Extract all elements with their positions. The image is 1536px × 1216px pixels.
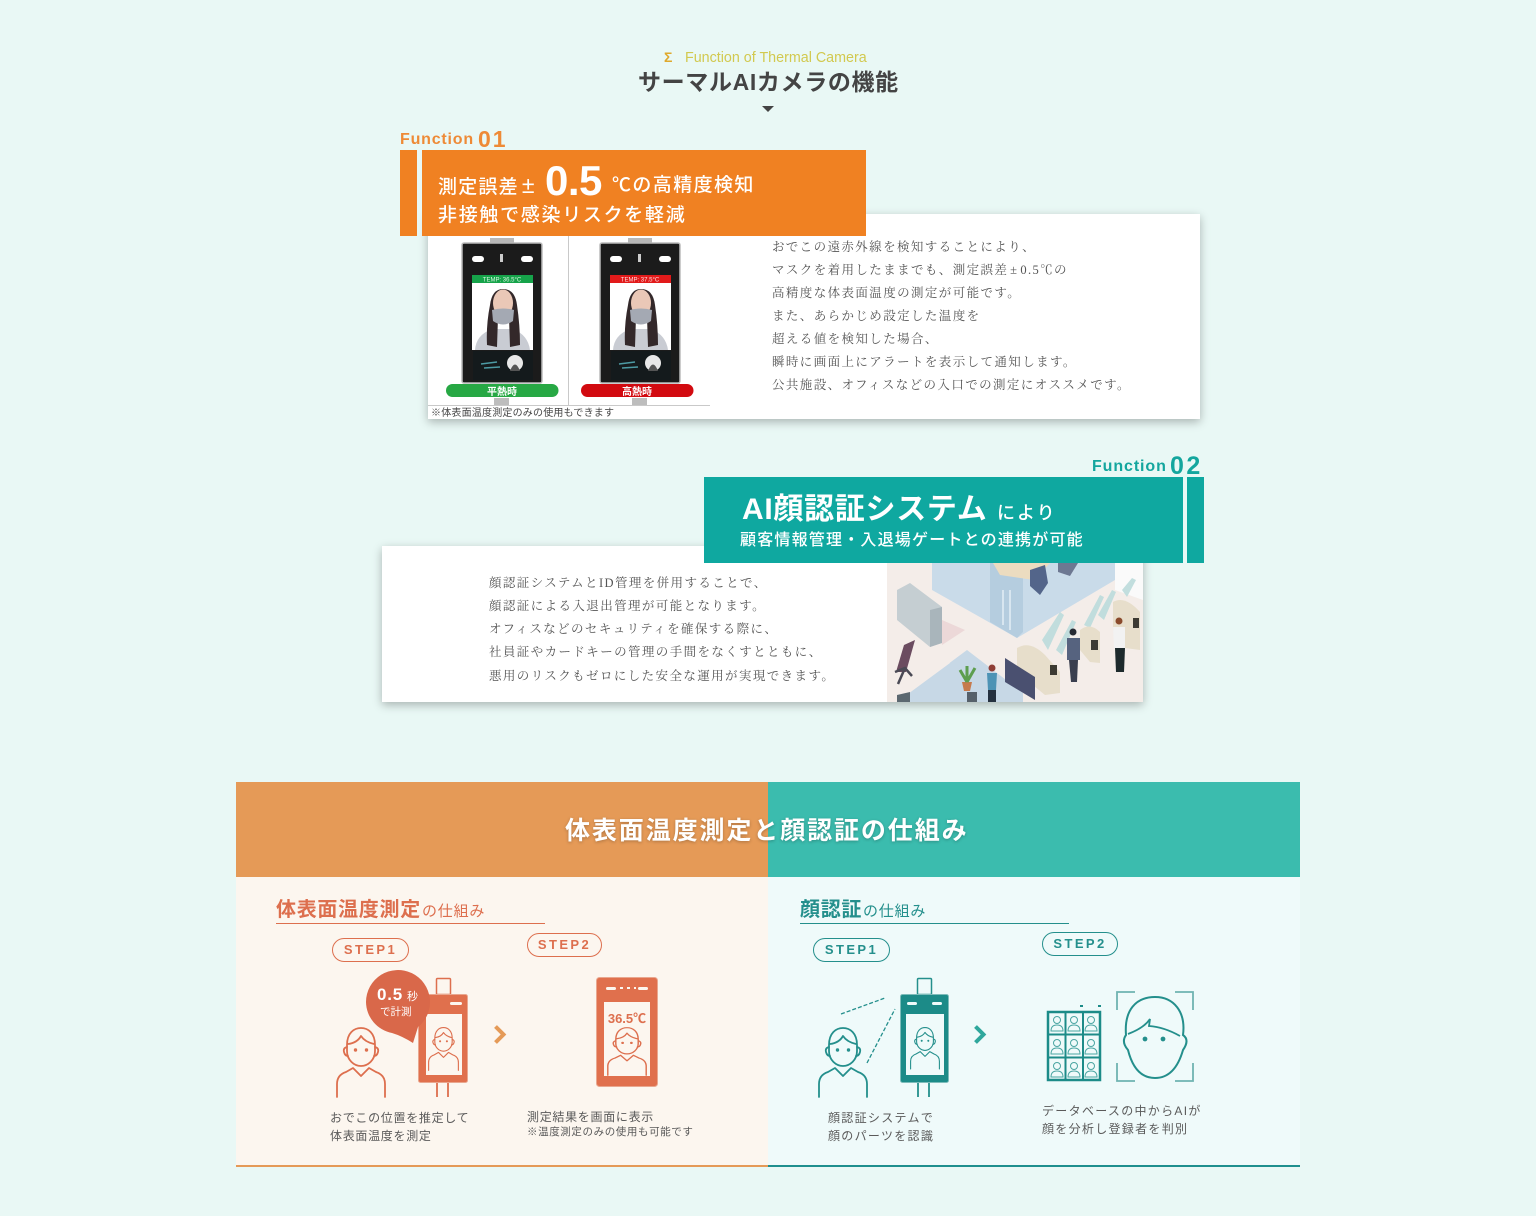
- description text: 公共施設、オフィスなどの入口での測定にオススメです。: [772, 378, 1131, 392]
- banner line 1: 0.5: [545, 157, 602, 204]
- banner line 2: 非接触で感染リスクを軽減: [438, 205, 686, 226]
- function 02 label: [1092, 452, 1203, 480]
- caption: temperature step 2: ※温度測定のみの使用も可能です: [527, 1126, 694, 1138]
- caption: temperature step 1: 体表面温度を測定: [330, 1129, 432, 1143]
- description text: 悪用のリスクもゼロにした安全な運用が実現できます。: [489, 669, 835, 683]
- sub heading: face recognition: の仕組み: [863, 903, 926, 920]
- panel: body temperature: [236, 877, 768, 1167]
- banner: function 01: [400, 150, 866, 236]
- speech bubble: 秒: [407, 989, 418, 1003]
- description text: 超える値を検知した場合、: [772, 332, 939, 346]
- caption: temperature step 1: おでこの位置を推定して: [330, 1111, 469, 1125]
- banner line 1: ℃の高精度検知: [612, 175, 755, 196]
- banner line 1: により: [997, 503, 1057, 523]
- step badge: face 1: STEP1: [825, 942, 878, 957]
- step 2 temperature: device: 36.5℃: [608, 1011, 646, 1026]
- step 2 temperature: device: [596, 978, 658, 1086]
- function 01 label: [400, 126, 508, 152]
- title: サーマルAIカメラの機能: [638, 69, 899, 95]
- sub heading: temperature: の仕組み: [422, 903, 485, 920]
- icon: sigma: Σ: [664, 49, 672, 65]
- sub heading: temperature: [276, 897, 545, 924]
- panel: face recognition: [768, 877, 1300, 1167]
- photo note: ※体表面温度測定のみの使用もできます: [431, 408, 614, 418]
- device: high temperature: [600, 238, 680, 405]
- banner line 1: 測定誤差: [438, 177, 519, 198]
- step badge: face 1: [813, 938, 890, 962]
- description text: おでこの遠赤外線を検知することにより、: [772, 240, 1036, 254]
- illustrations: all step drawings: [336, 970, 1194, 1098]
- illustration: isometric office with gates: [887, 563, 1143, 702]
- label: normal: 平熱時: [487, 385, 517, 398]
- device: high temperature: TEMP: 37.5°C: [621, 278, 660, 284]
- product photos: normal and high temperature: [428, 236, 710, 406]
- caption: temperature step 2: [527, 1110, 694, 1138]
- divider lines: [428, 236, 710, 406]
- speech bubble: [366, 970, 430, 1043]
- English subtitle: Function of Thermal Camera: [685, 50, 867, 66]
- description text: また、あらかじめ設定した温度を: [772, 309, 981, 323]
- function 01 label: Function: [400, 131, 474, 148]
- section header: [638, 49, 899, 112]
- label: high: [581, 384, 694, 398]
- header band orange: [236, 782, 768, 877]
- step badge: temperature 2: STEP2: [538, 937, 591, 952]
- caption: face step 1: [828, 1111, 934, 1143]
- banner accent: [400, 150, 417, 236]
- panel: function 01 card: [428, 214, 1200, 419]
- step badge: temperature 1: STEP1: [344, 942, 397, 957]
- caption: face step 2: 顔を分析し登録者を判別: [1042, 1122, 1188, 1136]
- step 1 face: device: [900, 978, 948, 1097]
- banner line 1: AI顔認証システム: [742, 493, 987, 526]
- step badge: temperature 1: [332, 938, 409, 962]
- function 02 label: Function: [1092, 458, 1167, 475]
- step 1 temperature: person: [337, 1028, 385, 1097]
- banner line 1: [438, 157, 755, 204]
- speech bubble: で計測: [380, 1005, 412, 1018]
- caption: face step 1: 顔のパーツを認識: [828, 1129, 934, 1143]
- arrow: face: [976, 1026, 984, 1042]
- description text: [772, 240, 1131, 392]
- description text: 顔認証システムとID管理を併用することで、: [489, 576, 768, 590]
- banner background: [704, 477, 1183, 563]
- step 1 temperature: device: [418, 978, 468, 1097]
- description text: マスクを着用したままでも、測定誤差 0.5℃の: [772, 263, 1068, 277]
- banner line 2: 顧客情報管理・入退場ゲートとの連携が可能: [740, 532, 1084, 549]
- speech bubble: 0.5: [377, 985, 403, 1004]
- banner background: [422, 150, 866, 236]
- description text: 顔認証による入退出管理が可能となります。: [489, 599, 766, 613]
- description text: 瞬時に画面上にアラートを表示して通知します。: [772, 355, 1077, 369]
- step badge: face 2: STEP2: [1053, 936, 1107, 951]
- scan dashes: [841, 998, 895, 1063]
- caption: temperature step 2: 測定結果を画面に表示: [527, 1110, 654, 1124]
- step badge: temperature 2: [527, 933, 602, 957]
- database grid: [1048, 1006, 1101, 1080]
- banner: function 02: [704, 477, 1204, 563]
- device: normal temperature: [462, 238, 542, 405]
- arrow: temperature: [496, 1026, 504, 1042]
- description text: オフィスなどのセキュリティを確保する際に、: [489, 622, 778, 636]
- description text: 高精度な体表面温度の測定が可能です。: [772, 286, 1021, 300]
- sub heading: temperature: 体表面温度測定: [276, 899, 421, 921]
- caption: face step 1: 顔認証システムで: [828, 1111, 934, 1125]
- description text: ±: [1010, 263, 1018, 277]
- function 01 label: 01: [478, 126, 508, 152]
- step badge: face 2: [1042, 932, 1118, 956]
- banner accent: [1187, 477, 1204, 563]
- label: high: 高熱時: [622, 385, 652, 398]
- device: normal temperature: TEMP: 36.5°C: [483, 278, 522, 284]
- sub heading: face recognition: [800, 897, 1069, 924]
- header band teal: [768, 782, 1300, 877]
- label: normal: [446, 384, 558, 398]
- caption: face step 2: データベースの中からAIが: [1042, 1104, 1202, 1118]
- description text: 社員証やカードキーの管理の手間をなくすとともに、: [489, 645, 823, 659]
- face scan: [1117, 992, 1193, 1081]
- heading: 体表面温度測定と顔認証の仕組み: [565, 817, 969, 845]
- function 02 label: 02: [1170, 452, 1203, 480]
- section: how it works: [236, 782, 1300, 1167]
- step 1 face: person: [819, 1028, 867, 1097]
- banner line 1: ±: [522, 172, 536, 198]
- caption: face step 2: [1042, 1104, 1202, 1136]
- sub heading: face recognition: 顔認証: [800, 899, 862, 921]
- panel: function 02 card: [382, 546, 1143, 702]
- caption: temperature step 1: [330, 1111, 469, 1143]
- description text: [489, 576, 835, 683]
- icon: down arrow: [762, 106, 774, 112]
